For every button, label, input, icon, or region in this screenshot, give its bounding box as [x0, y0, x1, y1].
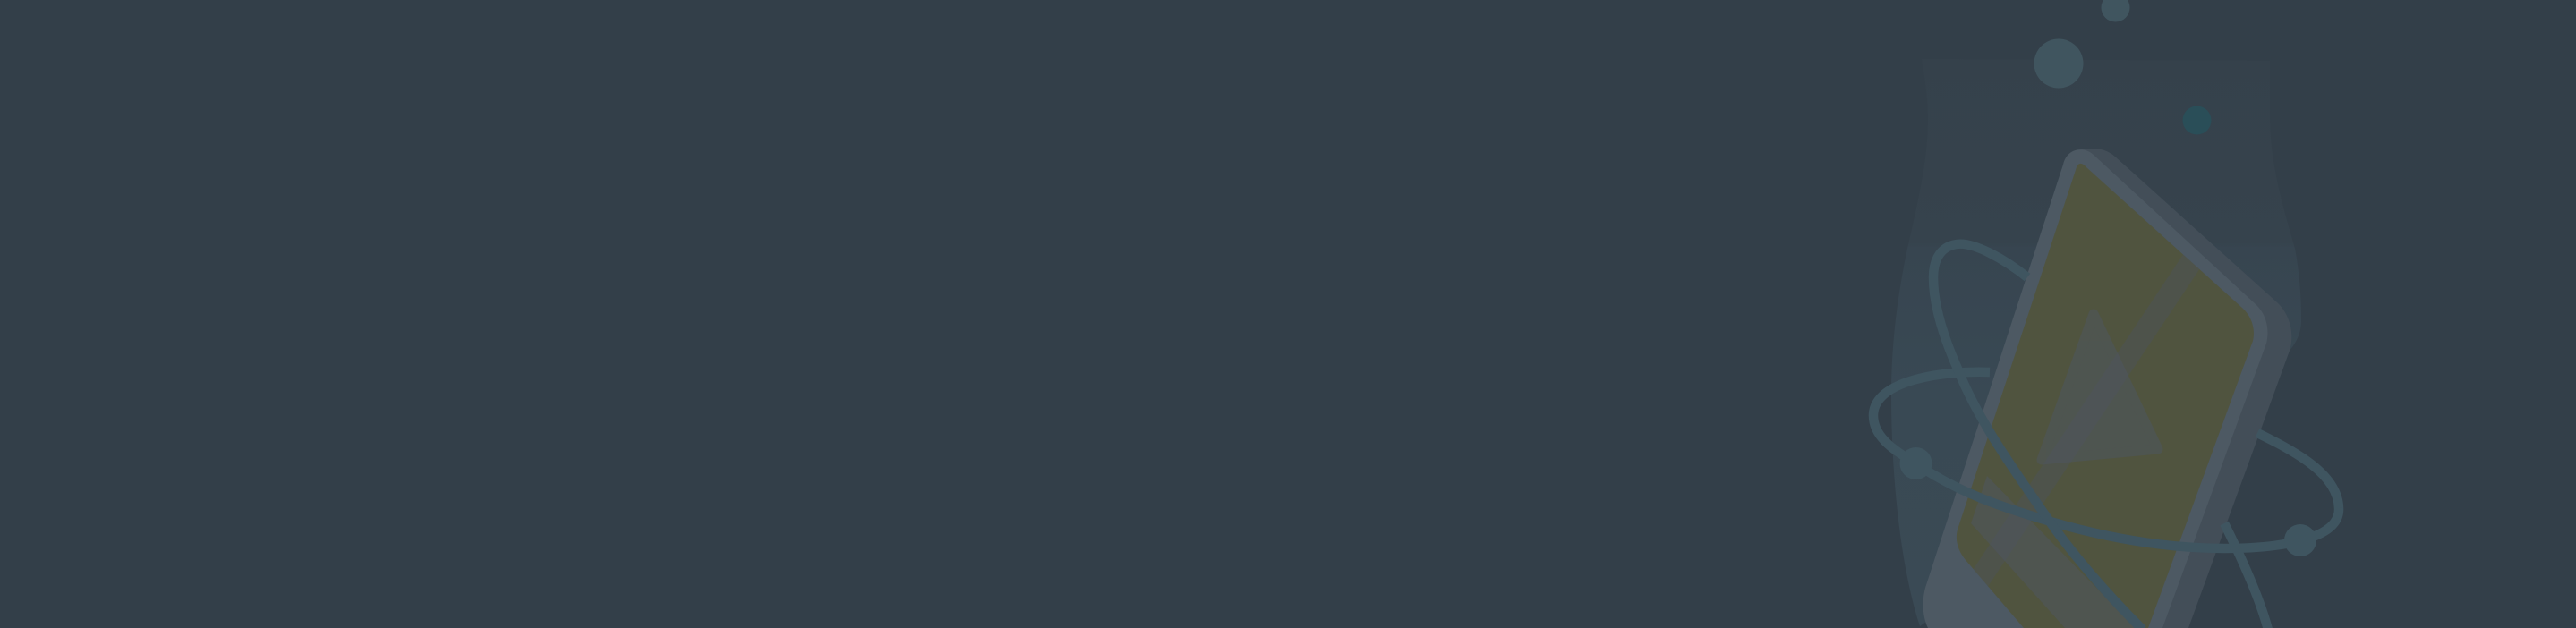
screen diagonal band: [1973, 253, 2200, 588]
screen overlays: [1971, 253, 2200, 628]
node: left: [1899, 447, 1932, 479]
bubble: large: [2034, 39, 2084, 88]
banner illustration: [1869, 0, 2343, 628]
screen lower shape: [1971, 476, 2136, 628]
orbit: horizontal: [1873, 372, 2339, 548]
flask silhouette: [1891, 59, 2301, 626]
orbit nodes: [1899, 447, 2316, 556]
bubble: teal: [2182, 106, 2211, 134]
orbit: lower right arc: [2224, 523, 2268, 628]
orbit: diagonal: [1933, 244, 2143, 628]
node: right: [2284, 524, 2316, 556]
bubble: top: [2102, 0, 2130, 21]
screen triangle: [2042, 314, 2158, 460]
bubbles: [2034, 0, 2211, 134]
device bezel: [1923, 149, 2268, 628]
device back edge: [2081, 149, 2291, 628]
atom orbits: [1873, 244, 2339, 628]
device screen: [1957, 164, 2254, 628]
tablet device: [1923, 149, 2291, 628]
